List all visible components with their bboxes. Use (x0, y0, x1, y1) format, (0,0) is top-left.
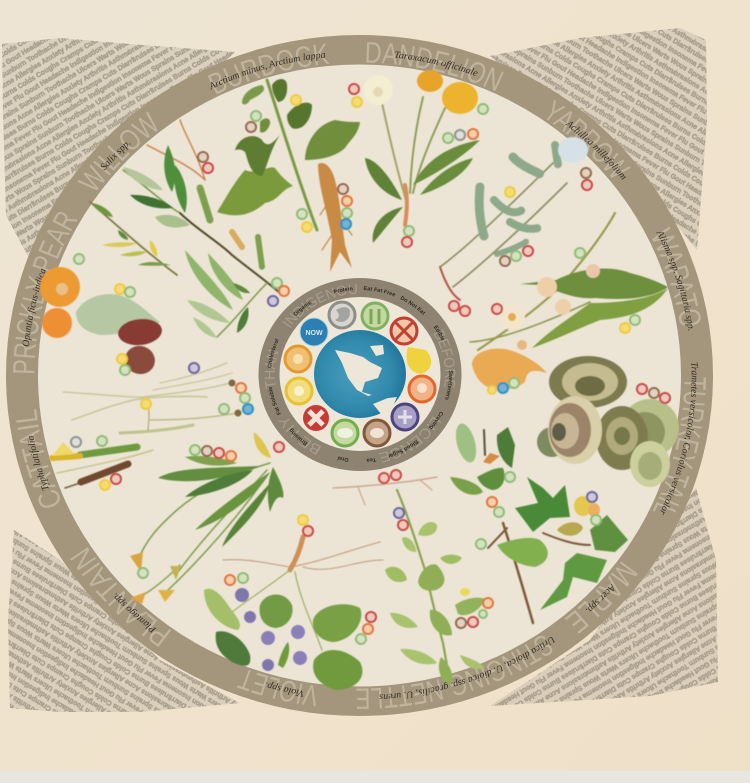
icon: yellow (286, 378, 312, 404)
central ring lettering: INDIGENOUS (282, 284, 357, 328)
common plant names on ring: VIOLET (237, 670, 316, 706)
text wall: bottom left corner (8, 530, 240, 712)
central ring lettering: BEFORE (434, 330, 456, 388)
plant: burdock (217, 79, 360, 272)
icon: gray (329, 302, 355, 328)
Latin plant names on ring: Typha latifolia (28, 436, 50, 491)
central ring lettering: BE HY (278, 418, 321, 455)
Latin plant names on ring: Salix spp. (100, 142, 130, 170)
plant: stinging nettle (333, 470, 493, 684)
common plant names on ring: WAPATO (652, 226, 701, 326)
icon: yellow teardrop (406, 347, 431, 374)
central ring lettering: THAN (264, 350, 278, 389)
common plant names on ring: DANDELION (366, 42, 504, 91)
central cream disk (280, 297, 440, 451)
icon: red cross (303, 405, 329, 431)
central ring labels: Cholesterol (267, 338, 281, 368)
common plant names on ring: PRICKLY PEAR (13, 212, 78, 373)
icon: organic now (300, 318, 328, 346)
central ring labels: Blood Sugar (388, 440, 419, 458)
icon: do not eat (391, 318, 417, 344)
common plant names on ring: CATTAIL (16, 409, 60, 508)
plant: cattail (52, 436, 153, 490)
plant: grass with roots (63, 363, 253, 433)
plant: prickly pear (40, 254, 163, 378)
central ring labels: Fat Soluble (268, 387, 281, 415)
plant: wapato (470, 213, 668, 394)
plant: maple (450, 421, 628, 623)
central ring labels (268, 286, 453, 462)
Latin plant names on ring: Opuntia ficus-indica (22, 268, 46, 346)
plant: willow (90, 120, 289, 338)
common plant names on ring: STINGING NETTLE (356, 636, 552, 709)
central ring labels: Organic (293, 300, 313, 318)
plant: dandelion (349, 70, 488, 247)
text wall: bottom right corner (490, 488, 718, 706)
Latin plant names on ring: Achillea millefolium (565, 122, 626, 180)
icon: purple (392, 404, 418, 430)
Latin plant names on ring: Taraxacum officinale (394, 51, 478, 76)
common plant names on ring: BURDOCK (208, 44, 330, 94)
common plant names on ring: MAPLE (564, 562, 638, 634)
globe (314, 330, 406, 418)
Latin plant names on ring: Alisma spp. Sagittaria spp. (656, 232, 692, 330)
text wall: top left corner (2, 38, 235, 260)
common plant names on ring: YARROW (546, 100, 630, 178)
central ring labels: Sweeteners (445, 370, 453, 400)
common plant names on ring: WILLOW (78, 112, 158, 190)
icon: green (332, 420, 358, 446)
central ring lettering (264, 284, 456, 463)
central ring labels: Edible (434, 325, 444, 340)
plant: yarrow (440, 137, 592, 316)
Latin plant names on ring: Urtica dioica, U. dioica ssp. gracilis, U. urens (380, 637, 556, 699)
inner disk (38, 64, 681, 686)
Latin plant names on ring (22, 51, 698, 699)
central ring labels: Protein (333, 286, 353, 294)
Latin plant names on ring: Trametes versicolor, Coriolus versicolor (660, 362, 698, 515)
icon: organic now: NOW (305, 330, 323, 337)
icon: green utensils (362, 303, 388, 329)
central ring (258, 278, 462, 471)
common plant names on ring: TURKEY TAIL (652, 377, 706, 512)
Latin plant names on ring: Viola spp. (266, 682, 303, 697)
icon: brown (364, 420, 390, 446)
central ring labels: Eat Fat Free (364, 286, 396, 296)
central ring labels: Tea (366, 458, 376, 462)
plant: turkey tail mushroom (537, 356, 679, 487)
plant: violet (204, 515, 383, 690)
icon: orange-yellow (285, 346, 311, 372)
central ring labels: Bruising (289, 428, 308, 446)
Latin plant names on ring: Plantago spp. (114, 593, 156, 633)
common plant names on ring: PLANTAIN (70, 547, 171, 647)
text wall: top right corner (490, 28, 707, 250)
bottom edge of cloth (0, 771, 750, 783)
Latin plant names on ring: Acer spp. (586, 584, 614, 611)
plant: plantain (130, 432, 284, 604)
central ring labels: Do Not Eat (400, 296, 426, 315)
central ring lettering: LICENSE (379, 416, 442, 463)
Latin plant names on ring: Arctium minus, Arctium lappa (210, 53, 326, 90)
central ring labels: Oral (338, 456, 348, 462)
icon: orange (409, 376, 435, 402)
central ring labels: Craving (429, 412, 443, 430)
